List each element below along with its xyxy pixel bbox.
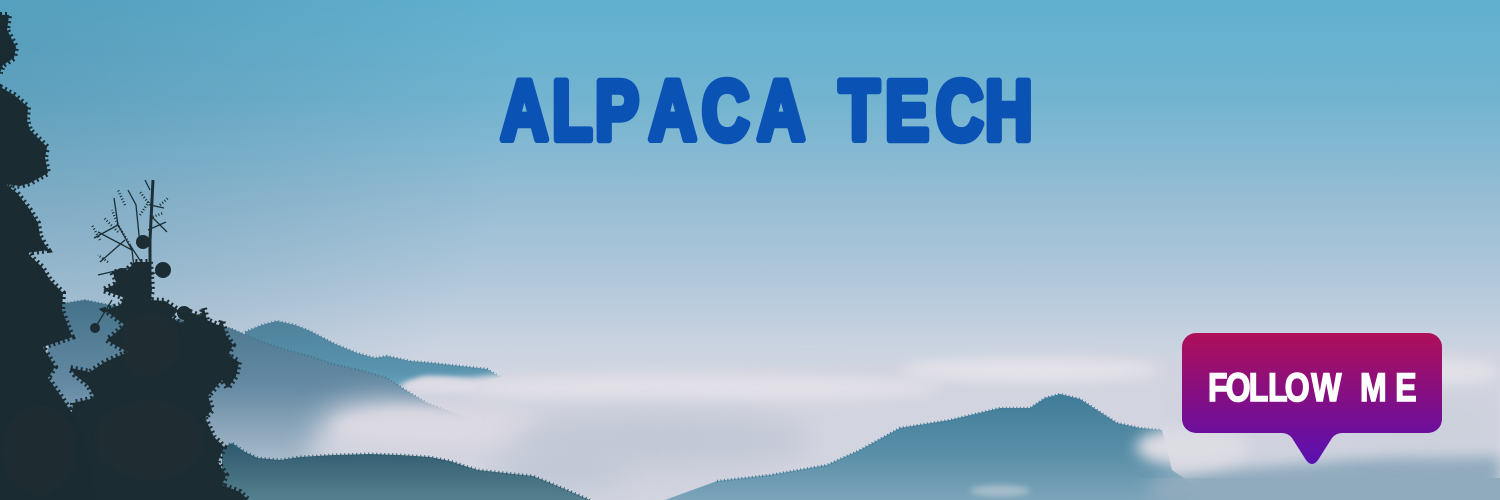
cloud wisp beside right mountain: [1136, 427, 1248, 467]
right lower haze and clouds: [1130, 405, 1500, 500]
title: Alpaca Tech: ALPACA TECH: [501, 64, 1032, 157]
follow me badge: [1182, 333, 1442, 464]
far mountain ridge: [245, 321, 500, 400]
left tree: [0, 15, 95, 500]
bare branches: [92, 180, 184, 328]
foreground forested ridge: [222, 443, 590, 500]
lower cloud bank: [312, 359, 1500, 500]
right mountain: [665, 394, 1215, 500]
tree body: [60, 262, 248, 500]
centre tree: [60, 180, 248, 500]
button label: FOLLOW ME: [1208, 365, 1417, 410]
middle mountain ridge: [40, 300, 474, 465]
speech bubble: [1182, 333, 1442, 464]
foliage clumps: [90, 235, 191, 333]
brown foliage specks on trees: [2, 313, 205, 495]
upper cloud behind ridge: [395, 350, 1500, 500]
